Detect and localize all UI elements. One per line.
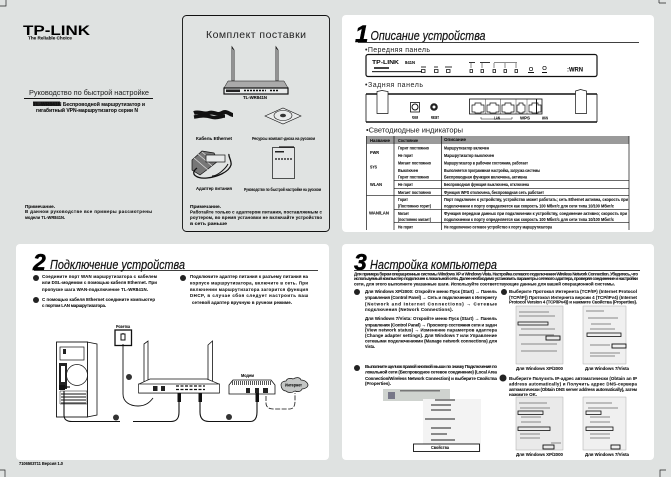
- heading: section 3: [354, 249, 640, 275]
- cover: note: [25, 204, 152, 220]
- step 1: open network connections: Vista.: [365, 344, 375, 349]
- step 1: open network connections: Для Windows XP/2000: Откройте меню Пуск (Start) → Панель: [365, 289, 497, 294]
- step 1: open network connections: [354, 289, 498, 349]
- table text: descriptions: Маршрутизатор выключен: [444, 153, 494, 158]
- cover: logo: The Reliable Choice: [28, 36, 73, 40]
- intro text: Для примера берем операционные системы Windows XP и Windows Vista. Настройка сетевого подключения Wireless Network Connection. Убедитесь, что: [354, 272, 638, 276]
- table text: descriptions: Маршрутизатор включен: [444, 146, 489, 150]
- panel: device connection: [16, 244, 329, 460]
- diagram: rear panel: POWER: [412, 115, 418, 120]
- step 1: или DSL-модемом с помощью кабеля Ethernet. При: [42, 280, 157, 285]
- table text: descriptions: [444, 146, 628, 230]
- table: LED indicators: [366, 136, 629, 230]
- cover: guide title: гигабитный VPN-маршрутизатор серии N: [36, 107, 138, 114]
- table text: names: PWR: [370, 150, 380, 155]
- step 3: сетевой адаптер вручную в ручном режиме.: [192, 300, 292, 305]
- step 1: [33, 274, 157, 292]
- step 2: properties: [354, 364, 498, 386]
- table text: names: WLAN: [370, 182, 382, 187]
- table text: header: [370, 137, 467, 143]
- table text: names: [369, 150, 389, 216]
- icon: power adapter: Адаптер питания: [196, 186, 232, 191]
- cover: note: В данном руководстве все примеры рассмотрены: [25, 209, 152, 214]
- table text: status: Не горит: [398, 153, 414, 158]
- diagram: rear panel: LAN: [494, 116, 500, 120]
- footer: model code: 7106503711 Версия 1.0: [19, 461, 64, 466]
- table text: status: Мигает постоянно: [398, 160, 431, 166]
- screenshot: TCP/IP Vista: [583, 306, 630, 371]
- icon: power adapter: [192, 151, 232, 191]
- icon: modem: [229, 373, 275, 394]
- note: package warning: в сеть раньше: [190, 221, 228, 226]
- icon: internet cloud: Интернет: [285, 382, 303, 388]
- icon: computer: [56, 342, 97, 417]
- step 3: TCP/IP: [501, 289, 638, 304]
- step 3: DHCP, в случае сбоя следует настроить ваш: [190, 293, 308, 298]
- cover: guide title: [24, 88, 153, 114]
- icon: internet cloud: [281, 378, 308, 392]
- step 1: open network connections: сетевыми подключениями (Manage network connections) для: [365, 338, 497, 344]
- table text: descriptions: Маршрутизатор в рабочем состоянии, работает: [444, 160, 529, 166]
- note: package warning: роутером, во время установки не включайте устройство: [190, 215, 322, 220]
- step 1: open network connections: (Network and Internet Connections) → Сетевые: [365, 302, 498, 306]
- intro text: [354, 272, 638, 286]
- table text: status: Мигает постоянно: [398, 190, 431, 195]
- screenshot: TCP/IP XP/2000: [516, 306, 564, 371]
- step 1: open network connections: управления (Control Panel) → Просмотр состояния сети и задач: [365, 322, 497, 328]
- table text: header: Название: [370, 138, 391, 143]
- step 2: properties: (Properties).: [365, 381, 391, 386]
- label: LED indicators: •Светодиодные индикаторы: [366, 126, 463, 134]
- heading: section 1: Описание устройства: [370, 28, 486, 43]
- cover: guide title: Руководство по быстрой настройке: [29, 88, 149, 97]
- table text: descriptions: Порт подключен к устройству, устройство может работать; сеть Ethernet активна, скорость при: [444, 197, 628, 202]
- step 1: open network connections: (View network status) → Изменение параметров адаптера: [365, 328, 498, 332]
- table text: descriptions: Выполняется программная настройка, загрузка системы: [444, 168, 540, 173]
- intro text: используемый компьютер подключен к локальной сети. Далее необходимо установить параметры сетевого адаптера, проверяя соединение и настройки: [354, 276, 638, 281]
- screenshot: IP Vista: [583, 397, 630, 457]
- cables: [64, 344, 295, 422]
- step 2: с портом LAN маршрутизатора.: [42, 303, 106, 308]
- icon: router: [138, 341, 220, 393]
- step 1: open network connections: Для Windows 7/Vista: Откройте меню Пуск (Start) → Панель: [365, 316, 497, 321]
- icon: router: TL-WR841N: [243, 95, 267, 100]
- step 1: open network connections: подключения (Network Connections).: [365, 307, 453, 312]
- table text: status: Не горит: [398, 182, 414, 187]
- table text: status: Мигает: [398, 211, 410, 216]
- icon: modem: Модем: [241, 373, 254, 378]
- table text: names: WAN/LAN: [369, 210, 389, 216]
- step 3: корпусе маршрутизатора, включите в сеть. При: [190, 280, 308, 286]
- heading: section 3: 3: [354, 249, 367, 275]
- step 3: TCP/IP: Protocol Version 4 (TCP/IPv4)) и нажмите Свойства (Properties).: [509, 300, 637, 304]
- diagram: rear panel: RESET: [431, 115, 439, 120]
- step 2: С помощью кабеля Ethernet соедините компьютер: [42, 297, 155, 302]
- cover: logo: [23, 23, 90, 40]
- diagram: network connection: [56, 324, 308, 422]
- note: package warning: Работайте только с адаптером питания, поставляемым с: [190, 210, 323, 214]
- table text: status: (Постоянно горит): [398, 204, 431, 208]
- note: package warning: Примечание.: [190, 204, 221, 209]
- table text: status: Выключен: [398, 168, 418, 173]
- diagram: front panel: TP-LINK: [372, 60, 399, 66]
- icon: resource CD: [252, 108, 315, 141]
- table text: descriptions: Функция передачи данных при подключении к устройству, соединение активно; скорость при: [444, 211, 627, 216]
- step 4: obtain IP automatically: автоматически (Obtain DNS server address automatically), затем: [509, 387, 637, 392]
- table text: names: SYS: [370, 164, 377, 170]
- screenshot: IP XP/2000: Для Windows XP/2000: [516, 452, 564, 457]
- heading: section 1: [355, 21, 639, 48]
- table text: header: Описание: [444, 137, 467, 142]
- panel: computer setup: [342, 244, 654, 460]
- table text: status: Не горит: [398, 224, 414, 230]
- table text: descriptions: Не подключено сетевое устройство к порту маршрутизатора: [444, 224, 552, 230]
- icon: quick guide booklet: Руководство по быстрой настройке на русском: [244, 187, 321, 192]
- screenshot: TCP/IP XP/2000: Для Windows XP/2000: [516, 366, 564, 371]
- table text: status: (постоянно мигает): [398, 217, 431, 222]
- table text: descriptions: Функция WPS отключена, беспроводная сеть работает: [444, 190, 545, 195]
- diagram: rear panel: [366, 90, 597, 122]
- screenshot: TCP/IP Vista: Для Windows 7/Vista: [585, 366, 630, 371]
- icon: ethernet cable: Кабель Ethernet: [196, 136, 233, 141]
- step 4: obtain IP automatically: address automatically) и Получить адрес DNS-сервера: [509, 382, 638, 386]
- note: package warning: [190, 204, 323, 226]
- step 3: включении маршрутизатора загорится функция: [190, 287, 308, 292]
- table text: status: Горит: [398, 197, 409, 202]
- table text: descriptions: подключении к порту определяется как скорость 100 Мбит/с для сети типа 10/100 Мбит/с: [444, 204, 614, 208]
- screenshot: context menu: Свойства: [431, 445, 449, 450]
- step 1: пропуске шага WAN-подключение TL-WR841N.: [42, 287, 148, 292]
- cover: note: Примечание.: [25, 204, 55, 209]
- step 2: properties: локальной сети (Беспроводное сетевое соединение) (Local Area: [365, 370, 498, 374]
- step 4: obtain IP automatically: Выберите Получить IP-адрес автоматически (Obtain an IP: [509, 376, 637, 381]
- diagram: rear panel: WPS: [520, 116, 530, 120]
- heading: section 1: 1: [355, 21, 368, 48]
- table text: descriptions: Беспроводная функция включена, активна: [444, 174, 527, 180]
- heading: section 2: 2: [32, 249, 46, 275]
- step 1: open network connections: управления (Control Panel) → Сеть и подключения к Интернету: [365, 295, 498, 300]
- step 3: Подключите адаптер питания к разъему питания на: [190, 274, 309, 279]
- diagram: front panel: :WRN: [567, 68, 583, 74]
- cover: note: модели TL-WR841N.: [25, 215, 65, 220]
- step 3: TCP/IP: (TCP/IP)) Протокол Интернета версии 4 (TCP/IPv4) (Internet: [509, 295, 638, 300]
- table text: header: Состояние: [398, 138, 418, 143]
- panel: package contents: [182, 16, 330, 232]
- table text: status: Горит постоянно: [398, 174, 429, 180]
- step 4: obtain IP automatically: [500, 374, 638, 397]
- step 2: properties: Connection/Wireless Network Connection) и выберите Свойства: [365, 376, 498, 381]
- step 2: [33, 297, 155, 308]
- icon: ethernet cable: [194, 112, 233, 141]
- diagram: rear panel: WAN: [542, 116, 548, 120]
- callout numbers: [113, 374, 232, 420]
- cover: guide title: TL-WR841N Беспроводной маршрутизатор и: [33, 101, 145, 108]
- panel: device description: [342, 15, 654, 232]
- table text: status: [398, 146, 431, 230]
- icon: quick guide booklet: [244, 147, 321, 192]
- icon: wall outlet: [115, 324, 132, 346]
- step 2: properties: Выполните щелчок правой кнопкой мыши по значку Подключения по: [365, 364, 497, 369]
- heading: package contents: Комплект поставки: [206, 29, 306, 41]
- table text: descriptions: подключении к порту определяется как скорость 100 Мбит/с для сети типа 10/100 Мбит/с: [444, 217, 614, 222]
- screenshot: IP XP/2000: [516, 397, 564, 457]
- step 1: open network connections: (Change adapter settings). Для Windows 7 или Управление: [365, 333, 498, 338]
- icon: router: [224, 47, 288, 100]
- step 3: TCP/IP: Выберите Протокол Интернета (TCP/IP) (Internet Protocol: [509, 289, 637, 294]
- step 3: [180, 274, 309, 305]
- table text: descriptions: Беспроводная функция выключена, отключена: [444, 182, 529, 187]
- cover: logo: TP-LINK: [23, 23, 90, 38]
- table text: status: Горит постоянно: [398, 146, 429, 150]
- screenshot: IP Vista: Для Windows 7/Vista: [585, 452, 630, 457]
- label: rear panel: •Задняя панель: [365, 82, 423, 89]
- icon: wall outlet: Розетка: [116, 324, 130, 329]
- icon: resource CD: Ресурсы компакт-диска на русском: [252, 136, 315, 141]
- heading: section 2: Подключение устройства: [50, 257, 185, 272]
- step 4: obtain IP automatically: нажмите OK.: [509, 392, 537, 397]
- diagram: front panel: 841N: [405, 60, 415, 65]
- heading: section 2: [32, 249, 318, 275]
- heading: section 3: Настройка компьютера: [370, 257, 497, 272]
- diagram: front panel: [366, 54, 597, 76]
- intro text: сети, для этого выполните указанные шаги. Используйте соответствующие данные для вашей операционной системы.: [354, 282, 615, 286]
- label: front panel: •Передняя панель: [365, 47, 430, 54]
- step 1: Соедините порт WAN маршрутизатора с кабелем: [42, 274, 157, 279]
- screenshot: context menu: [383, 389, 481, 452]
